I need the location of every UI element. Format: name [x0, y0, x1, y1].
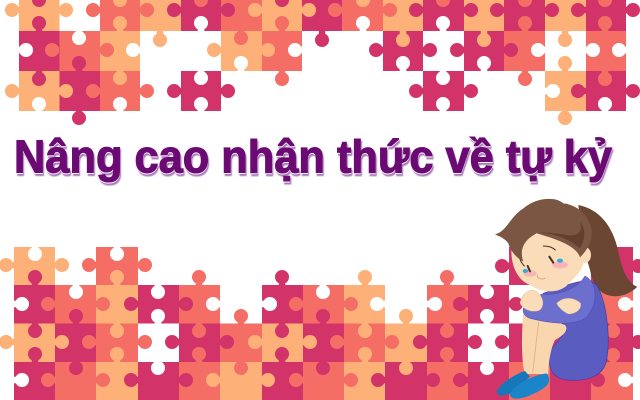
ear — [579, 247, 591, 263]
hair — [495, 199, 592, 262]
ponytail — [578, 205, 637, 296]
tears — [523, 259, 563, 273]
face — [511, 234, 584, 291]
puzzle border: bottom — [6, 247, 638, 400]
arms — [523, 276, 595, 323]
cheeks — [523, 261, 568, 277]
knee crease — [533, 322, 539, 373]
puzzle border: top — [12, 0, 633, 118]
facial features — [519, 246, 555, 279]
legs — [522, 313, 566, 374]
shoes — [497, 371, 530, 396]
dress — [543, 281, 608, 380]
illustration: sad girl hugging her knees — [495, 199, 637, 399]
title: Nâng cao nhận thức về tự kỷ — [14, 130, 612, 182]
hands — [520, 290, 581, 314]
hair shading — [537, 222, 584, 248]
